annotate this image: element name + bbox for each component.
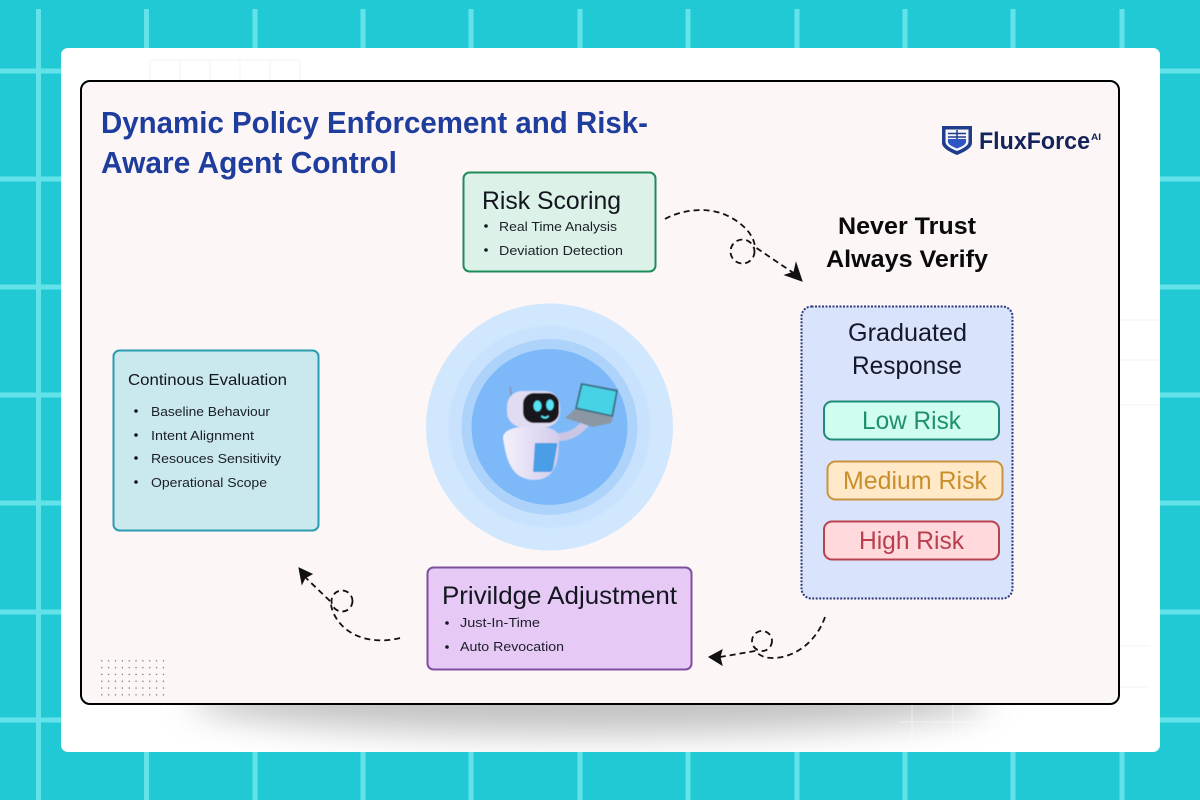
panel: graduated response (802, 306, 1012, 598)
central circles (426, 304, 673, 550)
panel: graduated response: Response (852, 352, 962, 380)
high risk (824, 522, 999, 560)
heading: never trust always verify (826, 213, 989, 273)
smile (542, 416, 548, 418)
low risk (824, 402, 999, 440)
panel: risk scoring: Real Time Analysis (499, 219, 618, 234)
arrow: risk scoring to graduated response (665, 210, 802, 281)
panel: graduated response: Graduated (848, 319, 967, 347)
dot grid decoration (101, 660, 165, 696)
panel: continuous evaluation: Continous Evaluation (128, 372, 287, 389)
panel: continuous evaluation: Operational Scope (151, 475, 267, 490)
title (101, 105, 648, 180)
laptop base (565, 409, 613, 427)
panel: continuous evaluation (114, 350, 318, 530)
panel: continuous evaluation: Baseline Behaviour (151, 404, 271, 419)
arm (556, 425, 584, 437)
panel shadow (186, 705, 994, 752)
medium risk (828, 462, 1002, 500)
panel: risk scoring (464, 172, 656, 272)
panel: continuous evaluation: Resouces Sensitivity (151, 451, 282, 466)
panel: privilege adjustment: Just-In-Time (460, 615, 540, 630)
panel: privilege adjustment: Auto Revocation (460, 639, 564, 654)
heading: never trust always verify: Never Trust (838, 213, 976, 240)
eyes (534, 400, 542, 412)
arrow: graduated response to privilege adjustment (709, 617, 825, 665)
head (507, 391, 560, 427)
panel: privilege adjustment: Privildge Adjustment (442, 582, 677, 610)
title: Dynamic Policy Enforcement and Risk- (101, 105, 648, 140)
low risk: Low Risk (862, 407, 961, 435)
body (503, 426, 559, 480)
main panel (81, 81, 1119, 704)
face (523, 393, 559, 423)
medium risk: Medium Risk (843, 467, 987, 495)
panel: risk scoring: Deviation Detection (499, 243, 623, 258)
laptop screen (575, 383, 618, 417)
high risk: High Risk (859, 527, 964, 555)
arrow: privilege adjustment to continuous evaluation (299, 568, 400, 640)
logo: FluxForce AI (942, 126, 1101, 155)
panel: privilege adjustment (428, 568, 692, 670)
panel: risk scoring: Risk Scoring (482, 187, 621, 215)
title: Aware Agent Control (101, 145, 397, 180)
logo: FluxForce AI: FluxForce (979, 128, 1090, 155)
antenna (510, 387, 512, 400)
panel: continuous evaluation: Intent Alignment (151, 428, 254, 443)
logo: FluxForce AI: AI (1091, 132, 1101, 142)
icon: robot with laptop (503, 383, 618, 480)
heading: never trust always verify: Always Verify (826, 246, 989, 273)
belly panel (533, 443, 557, 472)
icon: shield (942, 126, 972, 155)
